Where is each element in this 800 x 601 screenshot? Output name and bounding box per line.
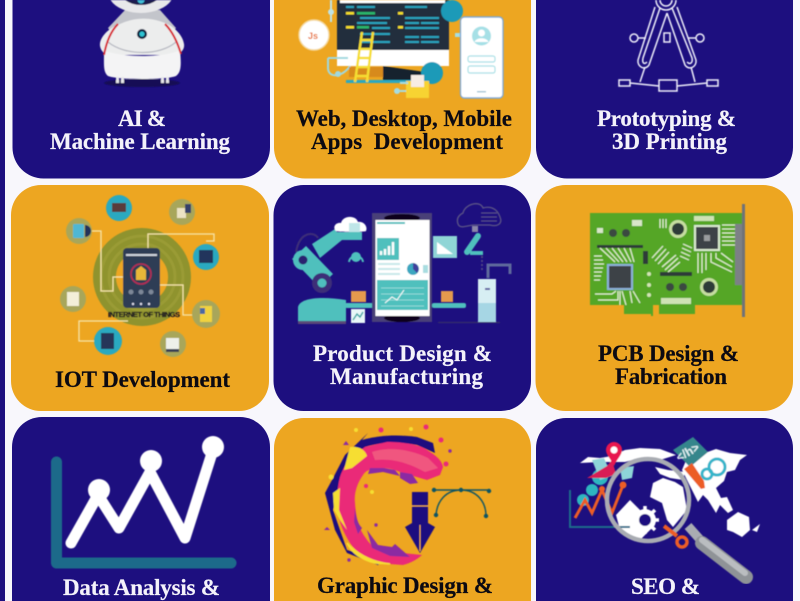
panel: prototyping and 3D printing: [536, 0, 793, 178]
heading: Fabrication: [615, 364, 727, 389]
heading: Manufacturing: [330, 364, 484, 389]
heading: Machine Learning: [50, 129, 230, 154]
panel: web, desktop and mobile apps: [274, 0, 531, 178]
heading: PCB Design &: [598, 341, 739, 366]
heading: IOT Development: [55, 367, 230, 392]
heading: Web, Desktop, Mobile: [296, 106, 512, 131]
icon: compass and pen tool: [619, 0, 718, 91]
panel: SEO: [536, 418, 793, 601]
icon: internet of things: [60, 195, 220, 357]
heading: AI &: [118, 106, 166, 131]
heading: SEO &: [631, 574, 700, 599]
panel: data analysis: [12, 417, 270, 601]
heading: Apps Development: [311, 129, 503, 154]
icon: colour splash C and pen nib: [324, 424, 491, 565]
icon: web and mobile development: Js: [308, 31, 318, 41]
icon: internet of things: INTERNET OF THINGS: [108, 310, 180, 319]
icon: web and mobile development: [299, 0, 503, 98]
panel: AI and machine learning: [12, 0, 270, 178]
icon: world map and magnifier: [570, 437, 760, 577]
panel: product design and manufacturing: [274, 185, 531, 411]
left edge strip: [0, 0, 5, 601]
icon: smart factory: [292, 204, 510, 324]
heading: 3D Printing: [612, 129, 728, 154]
panel: IOT development: [11, 185, 269, 411]
panel: PCB design and fabrication: [536, 185, 793, 411]
panel: graphic design: [274, 418, 531, 601]
heading: Product Design &: [313, 341, 492, 366]
icon: circuit board: [590, 204, 745, 317]
chart: rising line: [56, 436, 231, 563]
icon: world map and magnifier: </h>: [674, 440, 702, 465]
heading: Graphic Design &: [317, 573, 493, 598]
heading: Data Analysis &: [63, 575, 220, 600]
icon: robot: [100, 0, 184, 87]
heading: Prototyping &: [597, 106, 736, 131]
